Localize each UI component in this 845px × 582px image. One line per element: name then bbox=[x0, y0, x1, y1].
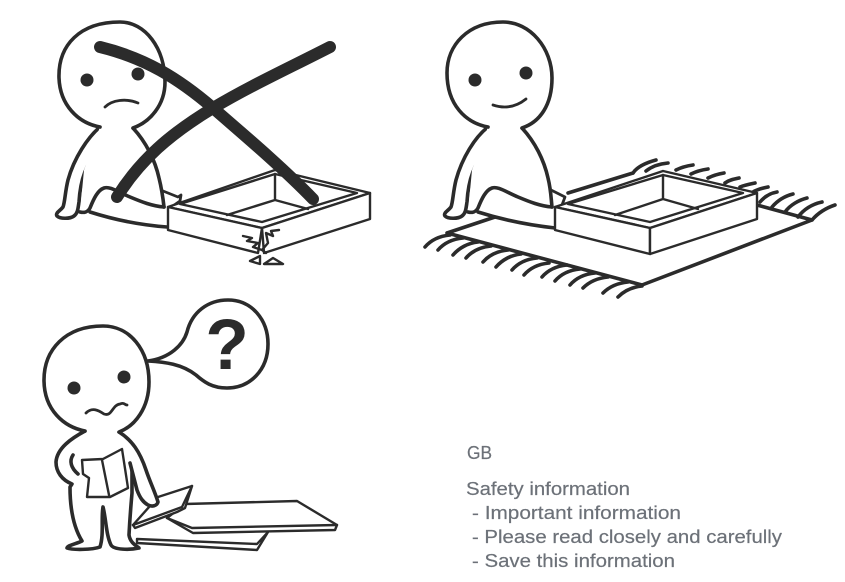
icon: rug with fringe bbox=[425, 160, 835, 297]
text block: safety information: Safety information bbox=[466, 478, 630, 499]
panel: confused person with manual bbox=[44, 300, 337, 550]
figure: confused person reading bbox=[44, 326, 158, 549]
icon: manual booklet bbox=[82, 449, 128, 497]
figure: happy person sitting bbox=[445, 22, 565, 228]
panel: correct, box on rug bbox=[425, 22, 835, 297]
text block: safety information: - Please read closely and carefully bbox=[472, 526, 783, 547]
figure: sad person sitting bbox=[57, 22, 181, 227]
text block: safety information: GB bbox=[467, 442, 492, 463]
text block: safety information: - Save this information bbox=[472, 550, 675, 571]
panel: incorrect, box on hard floor bbox=[57, 22, 370, 264]
icon: flat-pack panels bbox=[133, 486, 337, 550]
callout: question speech bubble bbox=[148, 300, 268, 388]
text block: safety information: - Important information bbox=[472, 502, 681, 523]
text block: safety information bbox=[466, 442, 783, 571]
callout: question speech bubble: ? bbox=[205, 306, 249, 385]
icon: cross-out mark bbox=[100, 47, 330, 199]
icon: damaged box bbox=[168, 170, 370, 264]
icon: intact box bbox=[555, 171, 757, 254]
